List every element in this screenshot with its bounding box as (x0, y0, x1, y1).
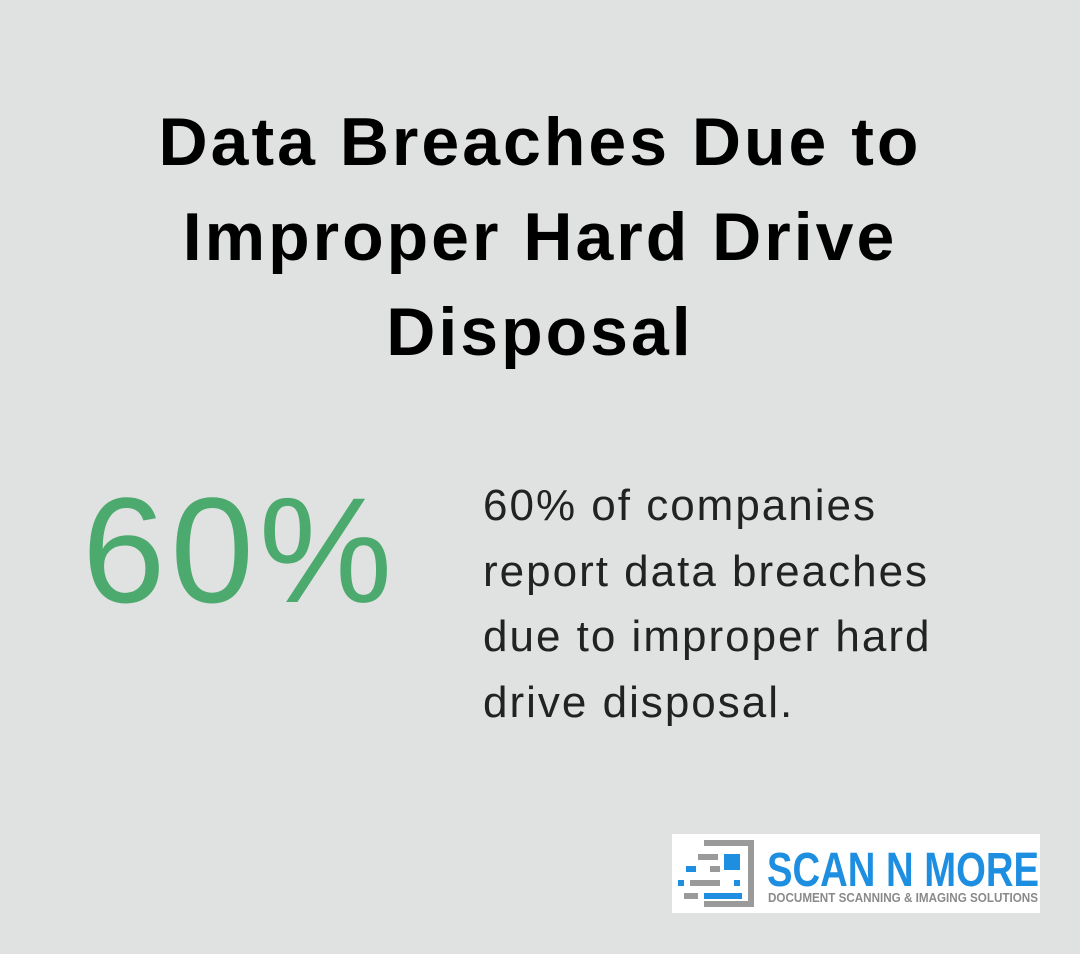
title: Improper Hard Drive (183, 199, 897, 275)
big stat: 60% (82, 466, 397, 634)
title: Disposal (386, 294, 694, 370)
description: due to improper hard (483, 612, 931, 661)
logo (672, 834, 1040, 913)
description: 60% of companies (483, 481, 877, 530)
title (159, 104, 921, 370)
description (483, 481, 931, 726)
description: drive disposal. (483, 678, 794, 726)
title: Data Breaches Due to (159, 104, 921, 180)
icon: scanner (678, 840, 754, 907)
description: report data breaches (483, 546, 929, 596)
